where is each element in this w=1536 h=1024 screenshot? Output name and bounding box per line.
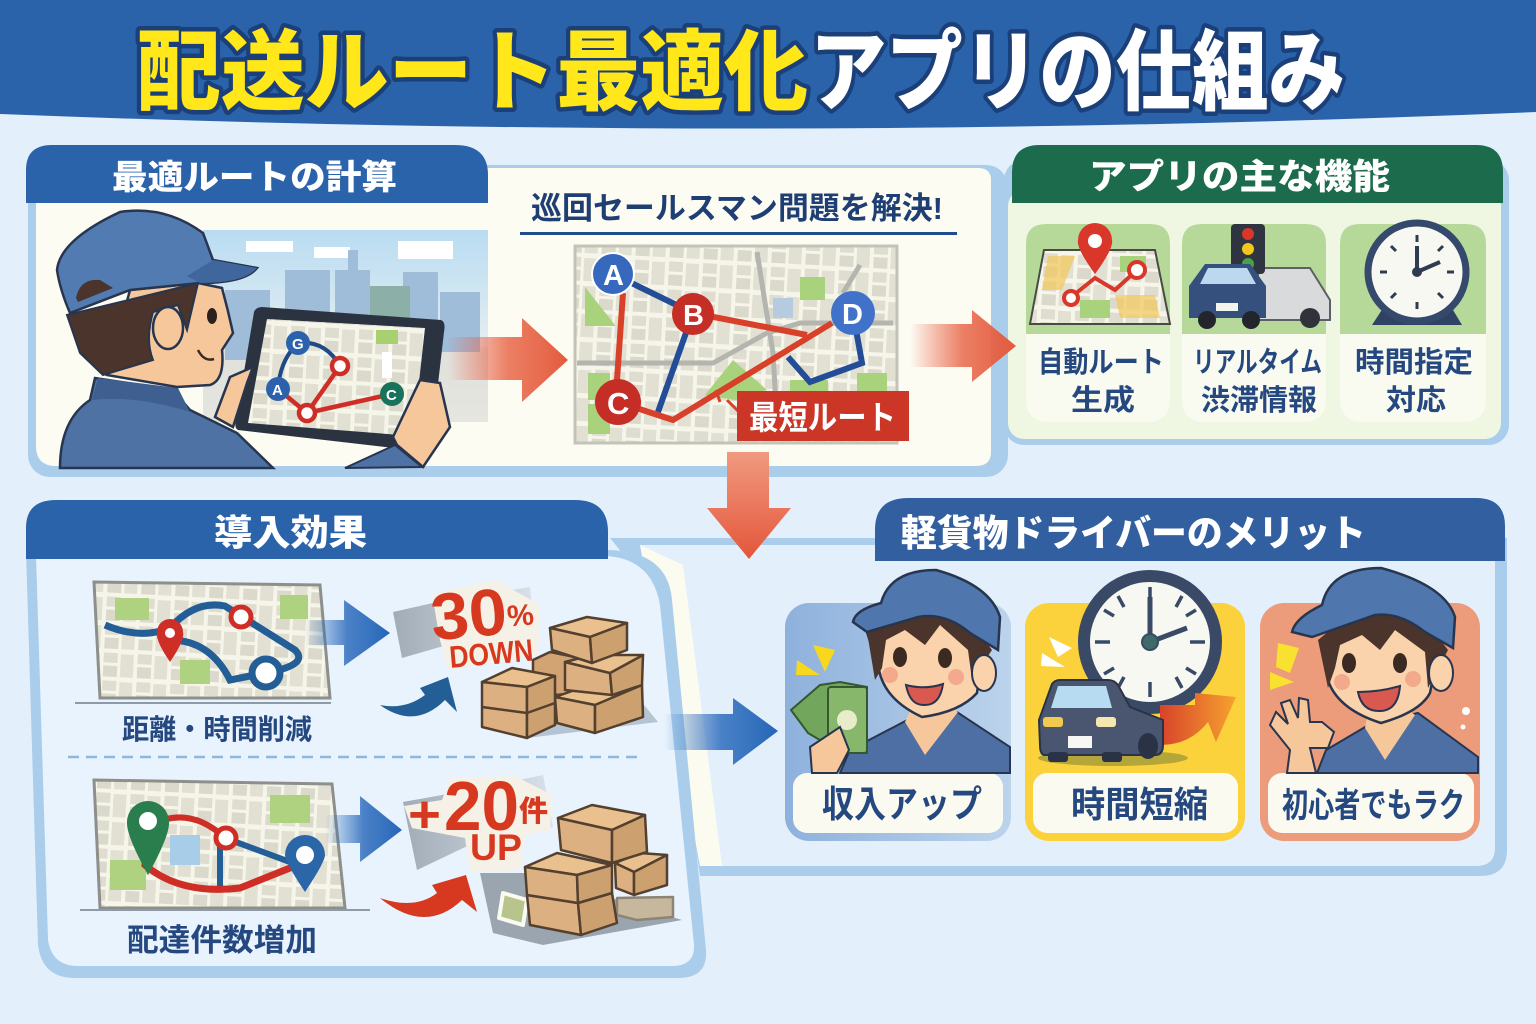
title: 配送ルート最適化 [137,23,808,122]
feature card: time window: 対応 [1386,384,1446,417]
arrow: tablet to route map [448,318,568,402]
driver body [60,378,273,468]
arrow: effects to merits [664,698,778,765]
heading: travelling salesman problem: 巡回セールスマン問題を解決! [531,191,943,226]
effect: distance and time reduction: 距離・時間削減 [122,714,312,745]
merit card: time saved: 時間短縮 [1071,784,1208,825]
boxes: parcels [480,805,682,945]
map fragment behind badge [403,775,553,870]
curved arrow [380,677,457,716]
feature card: live traffic [1182,224,1330,422]
badge: +20 up: 件 [519,795,548,828]
merit card: easy for beginners [1260,568,1480,841]
divider [68,756,642,758]
marker B: B [683,300,704,332]
boxes: stacked parcels [482,617,658,738]
arrow: to 30% down [305,600,390,666]
feature card: auto route: 生成 [1071,384,1135,417]
marker A [592,253,634,295]
map fragment behind badge [393,587,535,658]
title band [0,0,1536,129]
feature card: auto route: 自動ルート [1038,346,1164,379]
driver face [107,283,233,387]
feature card: auto route [1026,223,1170,422]
marker B [672,293,714,335]
panel: driver merits [610,498,1507,876]
marker C [595,379,641,425]
icon: tablet map: A [272,382,283,399]
marker D [831,291,875,335]
panel: optimal route calculation [26,145,1008,477]
label: shortest route: 最短ルート [749,399,896,436]
route map [575,246,909,443]
panel: app features [1004,145,1509,445]
arrow: down to merits [707,452,791,559]
marker C: C [607,386,629,421]
title [137,23,1345,122]
badge: +20 up: UP [470,827,522,868]
effect: more deliveries [80,767,682,958]
badge: 30% down: 30 [428,574,510,654]
feature card: time window: 時間指定 [1355,346,1473,379]
marker A: A [603,260,624,292]
heading: app features [1012,145,1503,203]
heading: driver merits: 軽貨物ドライバーのメリット [901,513,1366,554]
map: delivery route [94,780,345,908]
driver cap [57,211,257,313]
merit card: income up [785,570,1011,841]
effect: more deliveries: 配達件数増加 [127,923,317,958]
heading: optimal route [26,145,488,203]
illustration: driver with tablet [57,211,488,468]
feature card: live traffic: リアルタイム [1193,346,1322,379]
icon: tablet map: G [292,336,304,353]
merit card: income up: 収入アップ [822,784,982,825]
badge: 30% down: % [506,598,535,634]
title: アプリの仕組み [810,23,1345,122]
feature card: time window [1340,223,1486,422]
arrow: to 20 up [325,796,402,862]
badge: +20 up: 20 [444,767,519,845]
feature card: live traffic: 渋滞情報 [1201,384,1317,417]
heading: adoption effects: 導入効果 [214,512,367,553]
heading: adoption effects [26,500,608,559]
badge: 30% down [428,572,540,676]
marker D: D [842,299,863,331]
merit card: easy for beginners: 初心者でもラク [1282,787,1465,825]
icon: tablet map: C [386,387,397,404]
heading: optimal route: 最適ルートの計算 [112,158,397,197]
label: shortest route [737,391,909,441]
arrow: map to features [910,310,1016,382]
merit card: time saved [1025,576,1245,841]
map: distance route [94,582,330,698]
heading: app features: アプリの主な機能 [1089,158,1390,197]
icon: tablet map [235,307,445,451]
effect: distance and time reduction [75,572,658,745]
badge: 30% down: DOWN [448,633,535,675]
heading: driver merits [875,498,1505,561]
badge: +20 up: + [408,786,441,844]
badge: +20 up [404,767,552,872]
panel: adoption effects [26,500,706,978]
curved arrow [380,875,477,917]
